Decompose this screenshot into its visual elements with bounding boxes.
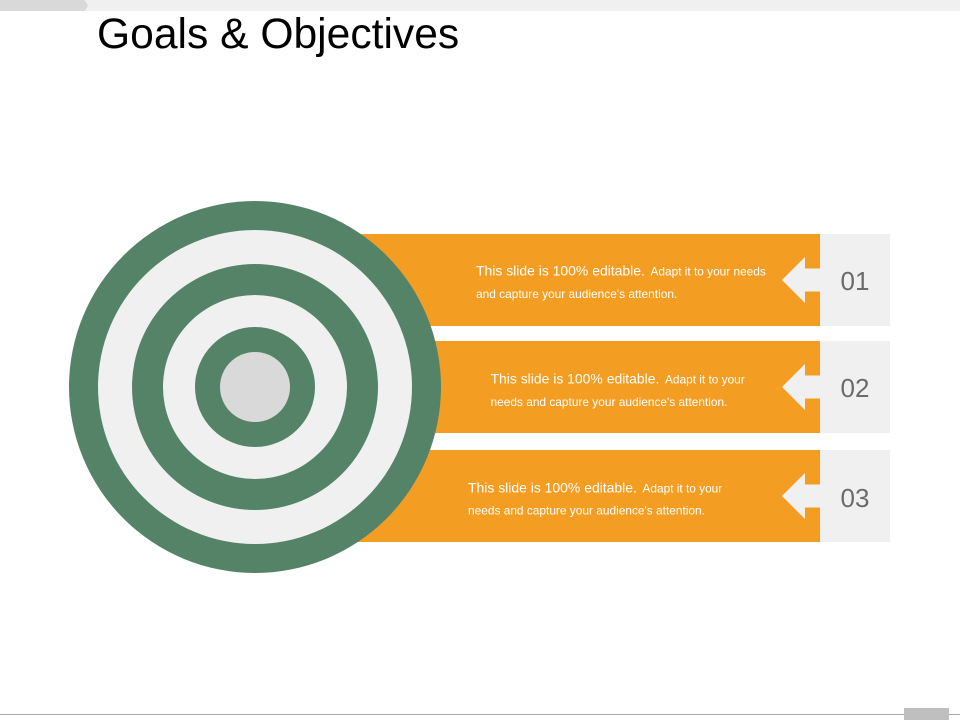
text 2: This slide is 100% editable.: [490, 370, 659, 386]
arrow 2: [782, 364, 820, 410]
arrow 3: [782, 473, 820, 519]
number 01: 01: [841, 266, 869, 296]
title: Goals & Objectives: [97, 10, 459, 58]
panel: objective 2: [350, 341, 890, 433]
top bar: [0, 0, 960, 11]
target icon: [69, 201, 441, 573]
text 1: This slide is 100% editable.: [476, 262, 645, 278]
text 3: This slide is 100% editable.: [468, 480, 637, 496]
text 3: Adapt it to your: [640, 482, 722, 496]
panel: objective 3: [350, 450, 890, 542]
text 1: and capture your audience's attention.: [476, 287, 677, 301]
panel: objective 1: [350, 234, 890, 326]
number 02: 02: [841, 373, 869, 403]
footer bar: [0, 708, 960, 720]
text 2: needs and capture your audience's attention.: [490, 395, 727, 409]
text 1: Adapt it to your needs: [648, 264, 766, 278]
number 03: 03: [841, 483, 869, 513]
arrow 1: [782, 257, 820, 303]
text 2: Adapt it to your: [662, 372, 745, 386]
text 3: needs and capture your audience's attention.: [468, 504, 705, 518]
